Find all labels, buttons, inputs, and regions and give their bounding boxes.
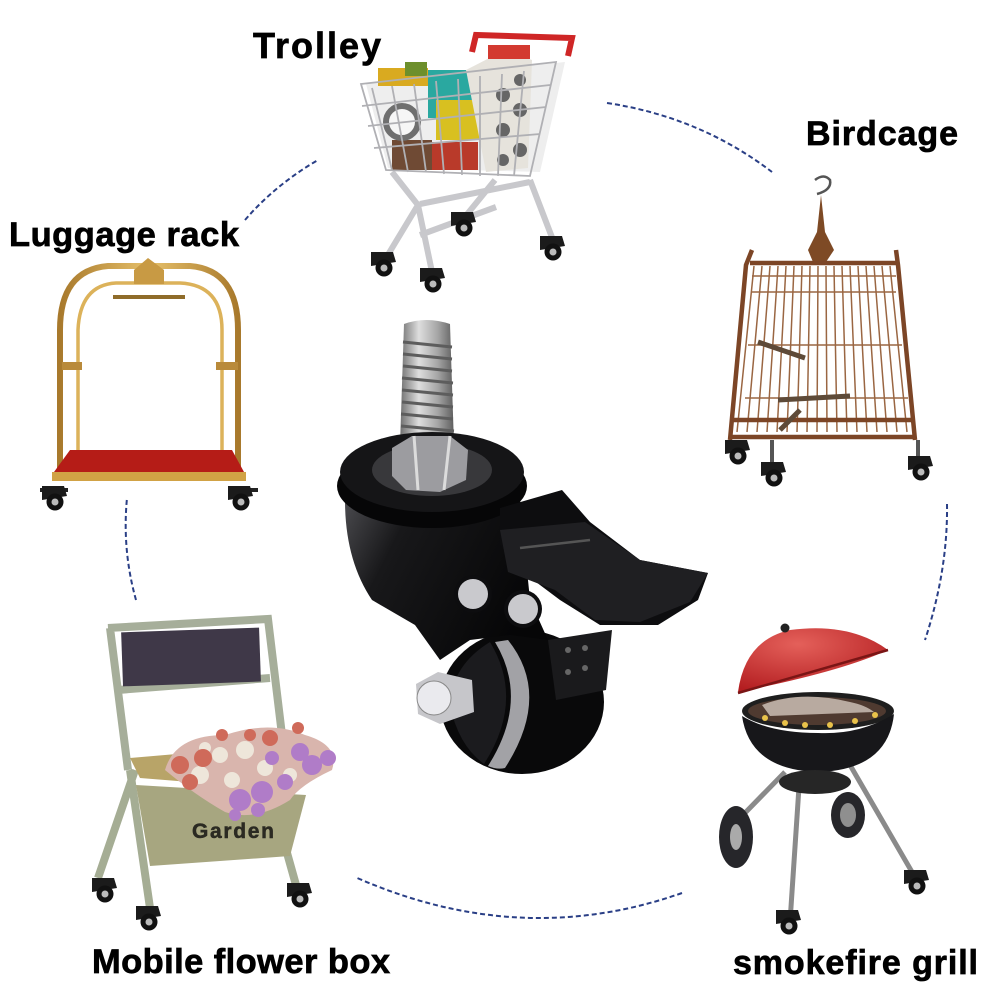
hex nut [392,436,468,492]
planter box [136,785,306,866]
basket wires [361,62,556,176]
hook and finial [815,176,830,194]
flowers [130,722,336,821]
wheels [719,806,753,868]
icon: birdcage [725,176,933,486]
title: Mobile flower box: Mobile flower box [92,943,390,981]
icon: shopping trolley [361,35,572,292]
axle bolt [416,672,474,724]
title: Luggage rack: Luggage rack [9,216,240,254]
frame [108,619,282,770]
threaded stud [400,320,454,445]
title: Birdcage: Birdcage [806,115,958,153]
contents of trolley [366,45,565,172]
brake lever [500,490,708,625]
title: Trolley: Trolley [253,25,381,66]
legs [742,765,912,922]
bowl [742,692,894,730]
rivets [454,575,492,613]
top plate [337,444,527,528]
title: smokefire grill: smokefire grill [733,944,978,982]
lid [738,628,888,692]
icon: smokefire grill [719,624,929,934]
trolley frame [386,172,553,272]
icon: luggage rack [40,258,258,510]
red handle [472,35,572,56]
central caster wheel [337,320,708,774]
fork body [345,500,548,660]
wheel [440,630,604,774]
icon: mobile flower box: Garden [192,820,274,843]
icon: mobile flower box [92,619,336,930]
brake pad [548,630,612,700]
dashed connector arcs [126,103,947,918]
